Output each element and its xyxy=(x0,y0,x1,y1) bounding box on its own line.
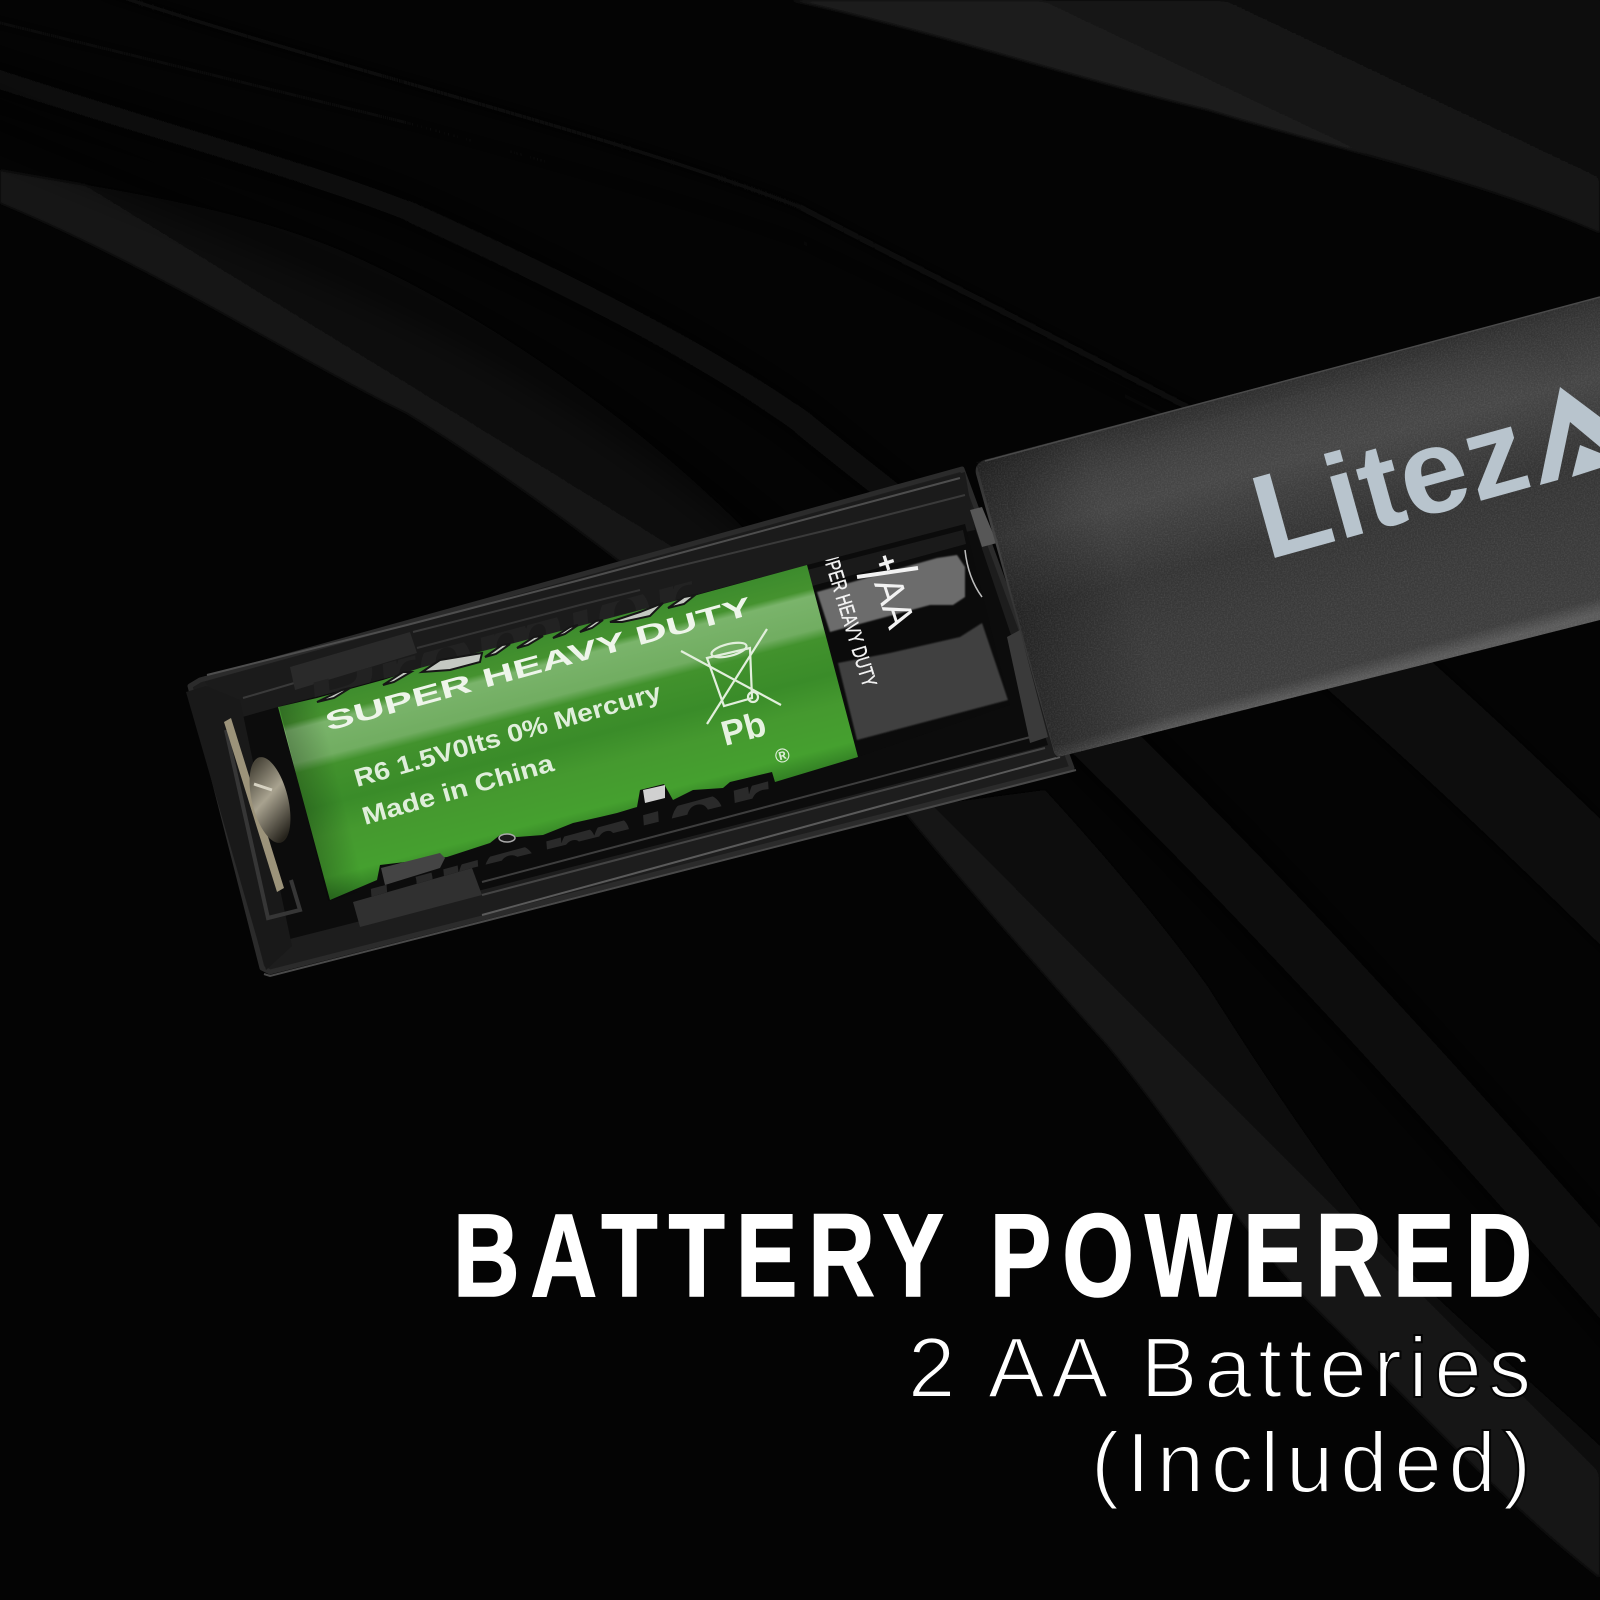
left end lip xyxy=(186,686,292,970)
label: origin: Made in China xyxy=(359,749,558,831)
subheading line 1: 2 AA Batteries xyxy=(908,1321,1531,1416)
background: upper right band xyxy=(790,0,1600,233)
headline block xyxy=(453,1190,1543,1511)
top rail lines xyxy=(207,478,965,698)
glossy reflection xyxy=(817,555,965,632)
tube lip xyxy=(1007,630,1048,743)
background: arc lines upper left xyxy=(0,0,1250,560)
top rail tab xyxy=(290,632,417,690)
green battery wrap xyxy=(278,565,858,901)
label: registered mark: ® xyxy=(773,744,793,769)
background: main sweep, lower right xyxy=(902,790,1600,1578)
label: voltage: R6 1.5V0lts 0% Mercury xyxy=(351,678,664,793)
barrel xyxy=(970,290,1600,770)
lower reflection xyxy=(838,623,1008,740)
label: Pb: Pb xyxy=(717,704,770,754)
reflection arc xyxy=(965,550,982,597)
background: right textured band xyxy=(1340,640,1600,1000)
dark brand print, top edge: Premier xyxy=(290,531,713,758)
battery black end xyxy=(807,524,1010,757)
subheading line 2: (Included) xyxy=(1091,1416,1531,1511)
label: polarity line xyxy=(857,568,918,577)
gasket tab xyxy=(970,507,997,547)
icon: crossed-out recycling bin xyxy=(681,629,781,724)
label: vertical heavy duty: SUPER HEAVY DUTY xyxy=(814,538,881,690)
product: flashlight xyxy=(186,290,1600,976)
label: super heavy duty: SUPER HEAVY DUTY xyxy=(322,591,755,737)
bottom rail tab xyxy=(353,868,482,927)
background: soft mid-right band xyxy=(1040,680,1600,1410)
dark brand print, bottom edge: Premier xyxy=(347,736,790,968)
icon: brand triangle xyxy=(1540,387,1600,485)
top rail, between outer edge and battery xyxy=(205,472,975,720)
top print fragments xyxy=(317,595,695,702)
brand wordmark: Litez xyxy=(1238,382,1542,585)
barrel top edge xyxy=(985,297,1600,461)
battery compartment case xyxy=(186,469,1076,976)
cavity below battery xyxy=(222,498,1048,942)
battery end text xyxy=(824,555,918,684)
bottom print fragments xyxy=(381,853,445,885)
label: AA: AA xyxy=(865,572,923,634)
label: plus sign: + xyxy=(868,550,904,576)
bottom rail ribs xyxy=(482,735,1060,915)
barrel texture xyxy=(970,290,1600,770)
spring contact xyxy=(224,718,298,892)
AA battery xyxy=(278,524,1010,968)
contact holder xyxy=(226,730,300,918)
barrel highlight xyxy=(1031,344,1549,536)
background: main sweep, upper left xyxy=(0,170,760,585)
